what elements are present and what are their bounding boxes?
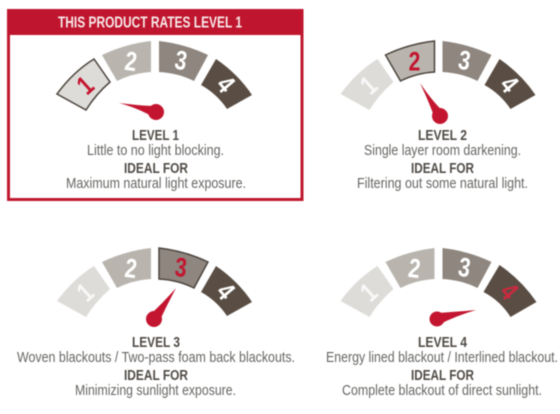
gauge: level 1: 1 [71, 71, 100, 101]
needle [119, 103, 164, 120]
gauge: level 2 [340, 41, 536, 124]
text: level 4 description: IDEAL FOR [411, 368, 474, 384]
needle [430, 310, 476, 326]
gauge: level 2: 1 [355, 71, 384, 101]
panel: level 1 product rating box [7, 9, 304, 200]
text: level 1 description: IDEAL FOR [124, 161, 188, 177]
needle [146, 288, 176, 327]
header banner [7, 9, 304, 35]
text: level 1 description: Maximum natural light exposure. [66, 176, 246, 192]
gauge: level 4 [340, 248, 536, 326]
text: level 1 description: LEVEL 1 [132, 128, 179, 144]
text: level 4 description [326, 335, 558, 399]
text: level 2 description [357, 128, 528, 192]
gauge: level 4: 3 [456, 252, 473, 284]
text: level 2 description: LEVEL 2 [418, 128, 467, 144]
gauge: level 3: 4 [210, 278, 241, 306]
text: level 3 description [17, 335, 295, 399]
needle [420, 83, 448, 124]
text: level 2 description: Single layer room darkening. [364, 143, 521, 159]
gauge: level 2: 3 [456, 45, 473, 77]
text: level 3 description: IDEAL FOR [124, 368, 188, 384]
gauge: level 2: 4 [493, 71, 524, 99]
gauge: level 4: 4 [493, 278, 524, 306]
text: level 2 description: IDEAL FOR [411, 161, 474, 177]
text: level 3 description: Woven blackouts / Two-pass foam back blackouts. [17, 350, 295, 366]
gauge: level 4: 1 [355, 278, 384, 308]
gauge: level 1: 2 [123, 46, 139, 78]
text: level 1 description: Little to no light blocking. [87, 143, 224, 159]
gauge: level 2: 2 [409, 47, 420, 77]
gauge: level 3: 1 [71, 278, 100, 308]
text: level 2 description: Filtering out some natural light. [357, 176, 528, 192]
gauge: level 3: 2 [123, 253, 139, 285]
gauge: level 1: 4 [210, 71, 241, 99]
text: level 4 description: LEVEL 4 [418, 335, 467, 351]
heading: THIS PRODUCT RATES LEVEL 1 [58, 14, 242, 32]
gauge: level 1: 3 [172, 45, 189, 77]
gauge: level 1 [57, 41, 252, 120]
text: level 3 description: Minimizing sunlight exposure. [75, 383, 236, 399]
gauge: level 4: 2 [406, 253, 422, 285]
text: level 3 description: LEVEL 3 [132, 335, 180, 351]
gauge: level 3: 3 [173, 253, 188, 284]
text: level 1 description [66, 128, 246, 192]
gauge: level 3 [57, 248, 252, 327]
